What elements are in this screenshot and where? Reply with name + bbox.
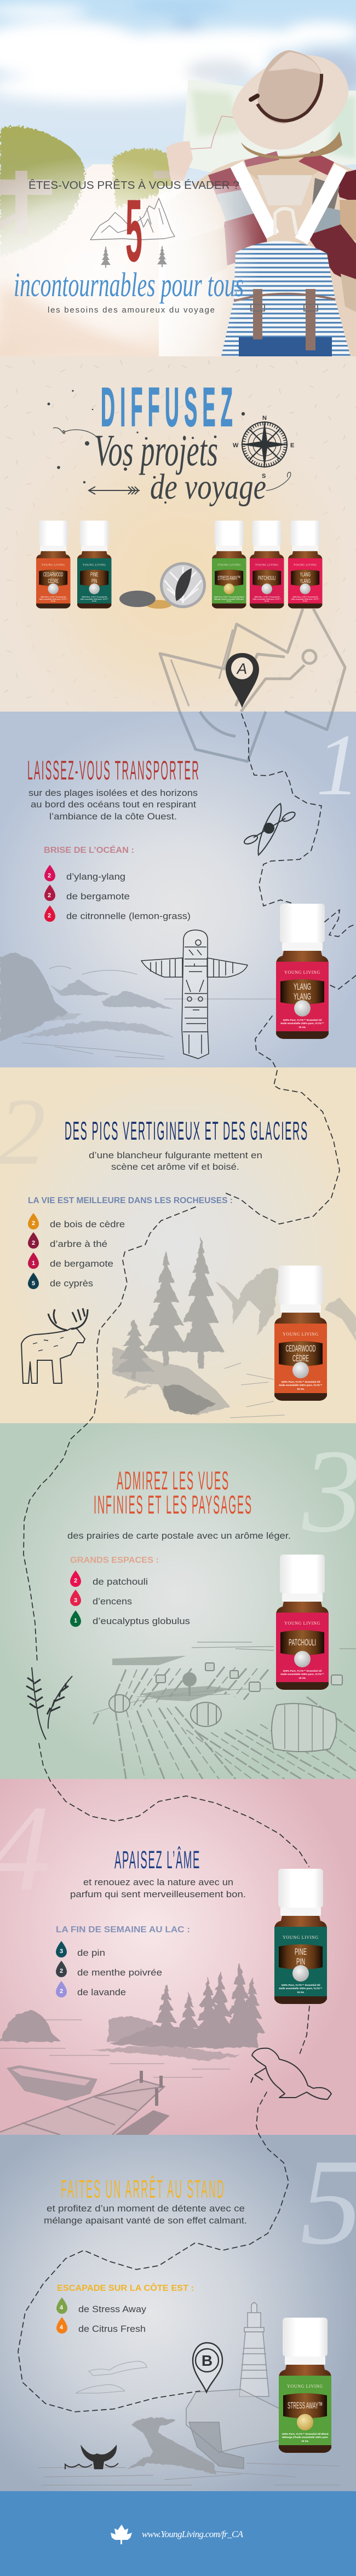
bottle: patchouli: YOUNG LIVING [255,564,278,567]
bottle: pine: YOUNG LIVING [283,1935,319,1940]
compass [233,415,294,480]
recipe list: 4 [60,2304,64,2311]
white fade over lower left [0,156,260,380]
island sketch [0,2010,61,2042]
bottle: cedarwood: 100% Pure, YLTG™ Essential Oil [41,596,66,598]
bottle: patchouli: Huile essentielle 100% pure, YLTG™ [252,598,281,600]
pine trees sketch [114,1237,225,1379]
bottle: stress away: 100% Pure, YLTG™ Essential Oil Blend [282,2433,329,2435]
moose [21,1308,88,1383]
bottle: pine: PINE [295,1947,307,1957]
recipe list: 1 [74,1618,77,1624]
backpack [221,209,351,356]
recipe heading: LA FIN DE SEMAINE AU LAC : [56,1925,190,1934]
felt pads [119,591,172,609]
bottle: cedarwood [36,521,70,609]
bottle: ylang ylang: 15 mL [298,1026,306,1029]
map sketch upper [160,609,345,712]
bottle: pine: 100% Pure, YLTG™ Essential Oil [281,1984,320,1986]
cliff sketch [186,2389,309,2469]
intro text: parfum qui sent merveilleusement bon. [70,1889,246,1899]
wheat [26,1667,72,1740]
script heading line 1: Vos projets [94,425,218,475]
bottle: cedarwood: 15 mL [297,1388,305,1390]
white straps [237,164,341,241]
intro text [89,1150,262,1172]
clouds [0,1,356,102]
heading [94,1466,252,1519]
recipe list: 5 [32,1280,35,1287]
arm and hand [166,141,193,181]
subtitle: les besoins des amoureux du voyage [48,305,215,315]
grass lines [225,1363,285,1418]
panel: section 2 [0,1067,356,1423]
intro text: et profitez d’un moment de détente avec ce [47,2203,245,2214]
compass letters: N [262,415,267,421]
bottle: ylang ylang: Huile essentielle 100% pure, YLTG™ [280,1022,324,1025]
bottle: stress away: 100% Pure, YLTG™ Essential Oil Blend [214,596,244,598]
bottle: ylang ylang: Huile essentielle 100% pure, YLTG™ [291,598,319,600]
intro text [44,2203,247,2226]
bottle: patchouli: Huile essentielle 100% pure, YLTG™ [280,1673,324,1676]
bottle: cedarwood: Huile essentielle 100% pure, YLTG™ [39,598,67,600]
bottle: stress away: STRESS AWAY™ [217,575,240,582]
map [183,79,356,174]
bottle: ylang ylang: YOUNG LIVING [284,970,320,975]
bottle: patchouli: 15 mL [265,600,269,602]
recipe list: de bergamote [66,891,130,902]
dashed travel route [18,714,356,2412]
recipe list: de cyprès [50,1278,93,1289]
bottle: ylang ylang: 15 mL [303,600,308,602]
bottle: pine: PIN [296,1956,305,1967]
panel: hero photo: 5 [125,181,142,280]
sea lines [38,2463,340,2485]
recipe list: de patchouli [93,1576,148,1587]
left dune grass [0,126,85,257]
sand at bottom left [0,285,164,356]
bottle: ylang ylang: 100% Pure, YLTG™ Essential Oil [292,596,318,598]
bottle: cedarwood: CÈDRE [48,577,59,585]
bottle: cedarwood: CEDARWOOD [286,1343,315,1354]
bottle: stress away: Mélange d’huile essentielle 100% pure [282,2436,328,2439]
recipe list: de Stress Away [78,2304,147,2314]
rowing boat [7,2065,97,2101]
bottle: stress away: YOUNG LIVING [217,564,240,567]
bottle: pine: PIN [91,578,97,585]
bottle: ylang ylang: YLANG [294,981,311,992]
compass letters [233,415,294,480]
bottle: pine: 15 mL [297,1991,305,1994]
panel: section 3 [0,1423,356,1779]
right dune grass [112,148,173,208]
panel: hero photo [0,0,356,380]
recipe list [56,1941,162,1997]
tree [140,1672,230,1701]
intro text [70,1877,246,1899]
website link: www.YoungLiving.com/fr_CA [142,2529,244,2539]
recipe list: 2 [32,1240,35,1246]
bottle: pine: 15 mL [92,600,97,602]
background [0,2135,356,2491]
recipe list: d’encens [93,1596,132,1607]
arrow [89,487,140,494]
intro text [28,788,198,822]
background [0,1779,356,2135]
bottle: cedarwood: Huile essentielle 100% pure, YLTG™ [279,1384,323,1387]
footer background [0,2491,356,2576]
poncho fade overlay [159,186,263,356]
background [0,1067,356,1423]
bottle: stress away: 15 mL [301,2440,309,2442]
bottle: pine: 100% Pure, YLTG™ Essential Oil [82,596,107,598]
sky background [0,0,356,356]
map pin B [193,2343,222,2392]
bottle: ylang ylang: YLANG [300,571,311,578]
intro text: au bord des océans tout en respirant [31,799,196,810]
recipe list [28,1213,125,1289]
recipe list: d’arbre à thé [50,1239,107,1249]
bottle: ylang ylang: YLANG [294,991,311,1002]
water lines [0,2020,230,2077]
icon: maple leaf [111,2525,132,2544]
bottle: ylang ylang [288,521,322,609]
intro text: et renouez avec la nature avec un [83,1877,233,1887]
rocks sketch [112,1347,230,1415]
recipe list: d’ylang-ylang [66,871,125,882]
intro question: ÊTES-VOUS PRÊTS À VOUS ÉVADER ? [28,179,239,192]
ink dots [47,390,245,504]
recipe list: de bois de cèdre [50,1219,125,1229]
recipe list: 2 [32,1220,35,1227]
recipe list: 2 [48,873,51,879]
bottle: cedarwood: YOUNG LIVING [283,1332,319,1337]
forest sketch [90,1963,266,2061]
beaver [251,2048,331,2099]
background [0,1423,356,1779]
bottle: cedarwood: 15 mL [51,600,56,602]
coastline sketch [0,952,174,1041]
bottle: patchouli: 15 mL [298,1677,306,1679]
poncho [164,151,356,356]
bottle: pine: Huile essentielle 100% pure, YLTG™ [279,1987,323,1990]
panel: footer [0,2491,356,2576]
recipe list: 4 [60,2324,64,2331]
map pin A: A [236,660,247,677]
bottle: pine: YOUNG LIVING [83,564,106,567]
bottle: patchouli: PATCHOULI [258,575,275,582]
hay bales [109,1663,342,1752]
hair [241,131,342,159]
background [0,712,356,1067]
bottle: ylang ylang: YOUNG LIVING [294,564,317,567]
wave sketch [127,2418,216,2474]
bottle: cedarwood: YOUNG LIVING [42,564,65,567]
trees icons [101,245,167,268]
recipe list: de Citrus Fresh [78,2324,146,2334]
recipe list: de bergamote [50,1258,113,1269]
dock [0,2071,170,2135]
recipe list: de pin [77,1948,105,1958]
bottle: patchouli: 100% Pure, YLTG™ Essential Oil [254,596,279,598]
recipe list: 2 [74,1578,77,1584]
bottle: pine: Huile essentielle 100% pure, YLTG™ [80,598,108,600]
background [0,356,356,712]
recipe heading: ESCAPADE SUR LA CÔTE EST : [57,2283,194,2293]
recipe list: 2 [48,912,51,919]
bottle: pine [77,521,111,609]
recipe list [56,2297,147,2334]
recipe list: 3 [60,1948,63,1955]
lighthouse [239,2302,269,2396]
whale tail [65,2445,118,2469]
hat [232,50,348,149]
recipe list: 1 [32,1260,35,1267]
intro text: l’ambiance de la côte Ouest. [49,811,177,822]
map sketch lower [180,712,332,761]
map pin B: B [202,2352,213,2369]
recipe list: de menthe poivrée [77,1967,162,1978]
bottle: pine: PINE [90,571,98,578]
mountains icon [90,198,175,240]
bottle: stress away: Mélange d’huile essentielle 100% pure [214,598,244,600]
intro text: des prairies de carte postale avec un arôme léger. [67,1530,291,1541]
recipe list: 2 [60,1988,63,1995]
panel: section 1 [0,712,356,1067]
flourish [53,428,291,490]
bottle: pine [274,1869,327,2004]
mountain sketch [215,1267,356,1341]
intro text: mélange apaisant vanté de son effet calmant. [44,2215,247,2226]
map pin A [226,653,259,708]
diffuser locket [160,562,206,608]
recipe list [70,1570,190,1627]
bottle: patchouli [250,521,284,609]
script heading line 2: de voyage [150,467,266,507]
bottle: cedarwood [274,1266,327,1401]
shore lines [22,966,279,1059]
bottle: stress away: 15 mL [227,600,232,602]
panel: section 4 [0,1779,356,2135]
recipe list: de lavande [77,1987,126,1997]
compass letters: W [233,442,239,449]
sand path [0,164,208,356]
recipe heading: LA VIE EST MEILLEURE DANS LES ROCHEUSES : [28,1196,233,1205]
bottle: patchouli: 100% Pure, YLTG™ Essential Oil [283,1670,322,1672]
bottle: ylang ylang: YLANG [300,578,311,585]
recipe list: 2 [48,892,51,899]
compass letters: E [290,442,294,449]
bottle: stress away: YOUNG LIVING [287,2384,323,2389]
bottle: cedarwood: CÈDRE [292,1353,309,1364]
bottle: patchouli [276,1555,329,1690]
panel: section 5 [0,2133,356,2491]
clouds sketch [76,2361,147,2393]
recipe heading: BRISE DE L’OCÉAN : [44,845,134,855]
bottle: stress away [212,521,246,609]
bottle: ylang ylang: 100% Pure, YLTG™ Essential Oil [283,1019,322,1021]
compass letters: S [262,473,266,480]
bottle: patchouli: PATCHOULI [289,1637,316,1648]
fence [0,171,170,234]
bottle: ylang ylang [276,904,329,1039]
recipe heading: GRANDS ESPACES : [70,1556,159,1565]
intro text: sur des plages isolées et des horizons [28,788,198,798]
bottle: cedarwood: CEDARWOOD [43,571,63,578]
fields sketch [93,1642,356,1779]
panel: section 4: APAISEZ L’ÂME [114,1846,200,1874]
recipe list: d’eucalyptus globulus [93,1616,190,1626]
intro text: scène cet arôme vif et boisé. [111,1162,239,1172]
intro text: d’une blancheur fulgurante mettent en [89,1150,262,1160]
panel: diffuser intro [0,356,356,712]
totem pole [141,930,248,1059]
bottle: stress away [279,2318,331,2453]
bottle: cedarwood: 100% Pure, YLTG™ Essential Oil [281,1381,320,1383]
bottle: patchouli: YOUNG LIVING [284,1621,320,1626]
recipe list: de citronnelle (lemon-grass) [66,911,191,921]
recipe list [44,865,191,922]
recipe list: 3 [74,1597,77,1604]
kayak [243,804,296,855]
recipe list: 2 [60,1968,63,1974]
